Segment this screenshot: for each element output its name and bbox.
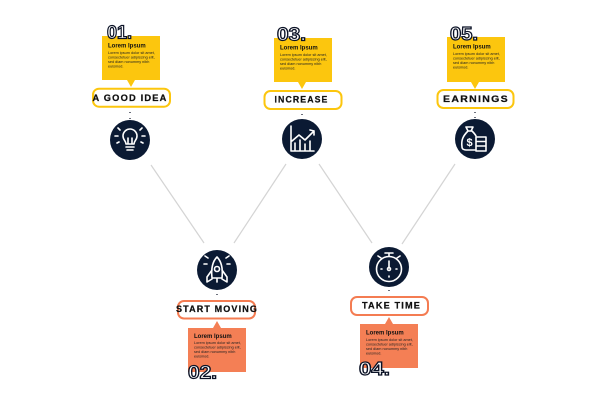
label pill 05: EARNINGS: [443, 94, 509, 105]
callout text 01: consectetuer adipiscing elit,: [108, 56, 155, 60]
callout 04: [360, 317, 418, 368]
icon: rocket: [197, 250, 237, 290]
callout 05: [447, 37, 505, 89]
icon: growth chart: [282, 119, 322, 159]
callout text 01: [108, 44, 155, 68]
callout text 01: sed diam nonummy nibh: [108, 60, 149, 64]
callout text 02: sed diam nonummy nibh: [194, 350, 235, 354]
callout 02: [188, 321, 246, 372]
number 02: 02.: [188, 362, 217, 382]
icon: light bulb: [110, 120, 150, 160]
callout text 05: [453, 44, 500, 70]
callout text 05: euismod.: [453, 66, 468, 70]
icon: money bag and coins: $: [466, 137, 473, 149]
callout text 04: Lorem ipsum dolor sit amet,: [366, 338, 413, 342]
callout text 03: euismod.: [280, 66, 295, 70]
connector dots 01: [129, 112, 131, 119]
callout text 02: euismod.: [194, 354, 209, 358]
icon: stopwatch: [369, 247, 409, 287]
callout text 02: [194, 334, 241, 358]
callout text 04: sed diam nonummy nibh: [366, 347, 407, 351]
number 03: 03.: [277, 24, 306, 44]
callout text 01: euismod.: [108, 64, 123, 68]
callout 03: [274, 38, 332, 89]
step 04: take time: [351, 247, 428, 379]
label pill 04: TAKE TIME: [362, 300, 421, 312]
connector dot 03: [301, 114, 303, 115]
callout text 05: sed diam nonummy nibh: [453, 61, 494, 65]
callout text 05: Lorem ipsum dolor sit amet,: [453, 52, 500, 56]
step 01: a good idea: [92, 22, 170, 160]
label pill 03: INCREASE: [274, 94, 328, 106]
connector dots 05: [474, 112, 476, 118]
connector lines: [151, 164, 455, 244]
callout text 04: [366, 330, 413, 356]
number 05: 05.: [450, 24, 478, 44]
label pill 02: START MOVING: [176, 304, 258, 315]
connector dot 04: [388, 290, 390, 291]
callout text 03: sed diam nonummy nibh: [280, 62, 321, 66]
callout text 01: Lorem Ipsum: [108, 44, 146, 50]
callout text 03: [280, 46, 327, 70]
callout text 02: consectetuer adipiscing elit,: [194, 346, 241, 350]
callout text 05: consectetuer adipiscing elit,: [453, 56, 500, 60]
callout text 02: Lorem Ipsum: [194, 334, 232, 340]
callout text 03: Lorem Ipsum: [280, 46, 318, 52]
step 05: earnings: [438, 24, 514, 159]
callout text 04: euismod.: [366, 352, 381, 356]
label pill 01: A GOOD IDEA: [92, 93, 168, 104]
step 02: start moving: [176, 250, 258, 382]
callout text 01: Lorem ipsum dolor sit amet,: [108, 51, 155, 55]
callout text 04: Lorem Ipsum: [366, 330, 404, 336]
callout text 04: consectetuer adipiscing elit,: [366, 342, 413, 346]
callout 01: [102, 36, 160, 87]
number 01: 01.: [107, 22, 132, 42]
callout text 05: Lorem Ipsum: [453, 44, 491, 50]
connector dot 02: [216, 294, 218, 295]
callout text 03: Lorem ipsum dolor sit amet,: [280, 53, 327, 57]
number 04: 04.: [359, 359, 390, 379]
step 03: increase: [264, 24, 342, 159]
callout text 03: consectetuer adipiscing elit,: [280, 58, 327, 62]
callout text 02: Lorem ipsum dolor sit amet,: [194, 341, 241, 345]
